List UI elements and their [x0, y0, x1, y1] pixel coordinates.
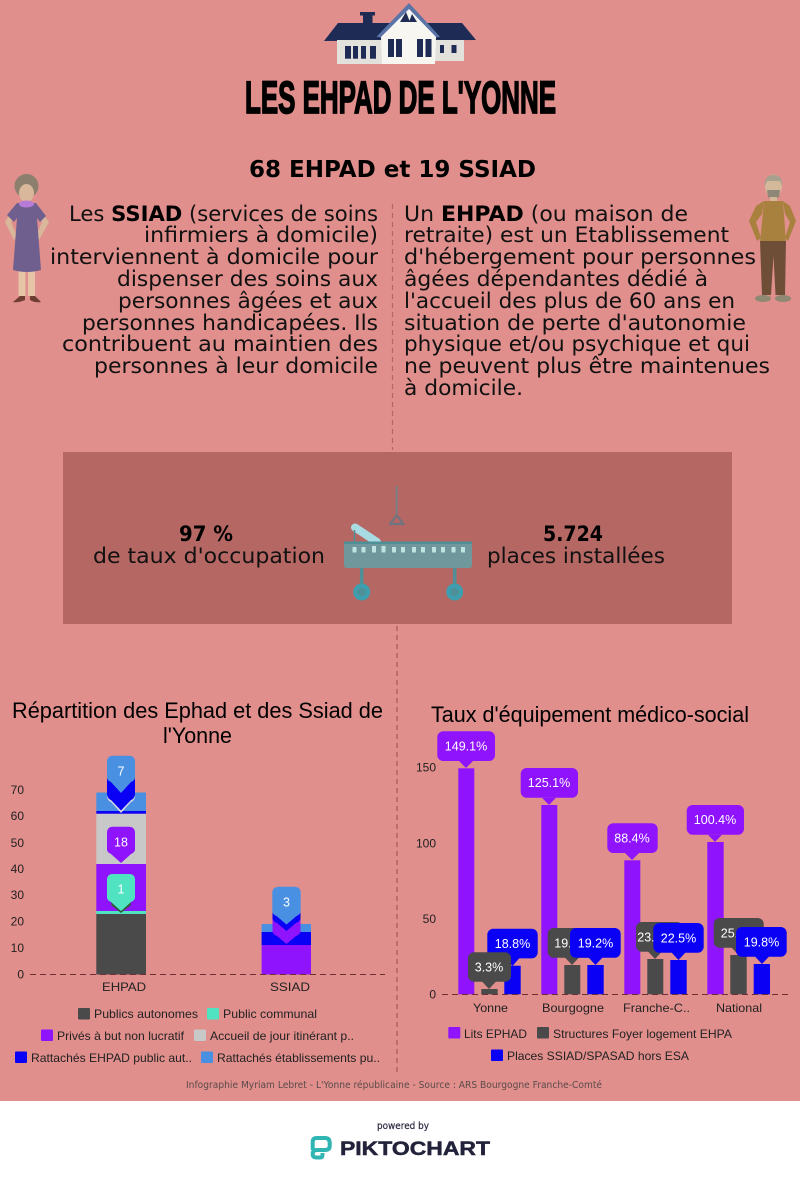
chart title: Répartition des Ephad et des Ssiad de: [12, 698, 383, 723]
callout: 25.x% structures: [714, 918, 764, 955]
icon: elderly man: [749, 174, 796, 302]
callout: blue SSIAD: [272, 905, 300, 931]
text block: EHPAD: à domicile.: [404, 376, 523, 400]
text block: SSIAD: [50, 202, 378, 378]
callout: 3: 3: [283, 896, 290, 910]
callout: 1: [107, 874, 135, 913]
y axis labels: [11, 783, 24, 982]
y axis labels: 100: [416, 836, 436, 850]
callout: 22.5%: 22.5%: [661, 932, 696, 946]
text block: SSIAD: contribuent au maintien des: [62, 332, 378, 356]
stat: places: places installées: [487, 544, 665, 568]
callout: 22.5%: [653, 923, 704, 960]
baseline: [442, 994, 790, 996]
chart title: [12, 698, 383, 748]
callout: rattachés blue: [107, 775, 135, 810]
callout: 3.3%: [468, 952, 511, 989]
callout: rattachés gray: [107, 785, 135, 813]
callout: 18.8%: [487, 929, 538, 966]
y axis labels: 60: [11, 809, 24, 823]
legend: Places SSIAD/SPASAD hors ESA: [507, 1049, 689, 1063]
callout: 23.x% structures: 23.1%: [637, 930, 673, 944]
y axis labels: [416, 760, 436, 1002]
text block: EHPAD: d'hébergement pour personnes: [404, 245, 756, 269]
stat: occupancy: de taux d'occupation: [93, 544, 325, 568]
x axis labels: Yonne: [473, 1001, 508, 1015]
panel: key figures: [63, 452, 732, 624]
callout: 19.2%: 19.2%: [578, 936, 613, 950]
legend: Accueil de jour itinérant p..: [210, 1029, 354, 1043]
footer: Piktochart branding: PIKTOCHART: [340, 1139, 490, 1160]
text block: SSIAD: Les SSIAD (services de soins: [69, 202, 378, 226]
x axis labels: SSIAD: [270, 980, 310, 994]
x axis labels: [473, 1001, 762, 1015]
text block: EHPAD: physique et/ou psychique et qui: [404, 332, 750, 356]
subtitle: 68 EHPAD et 19 SSIAD: [249, 155, 536, 183]
callout: 149.1%: [437, 731, 495, 768]
chart: taux d'équipement: [416, 702, 790, 1063]
callout: 125.1%: 125.1%: [528, 776, 570, 790]
y axis labels: 70: [11, 783, 24, 797]
footer: Piktochart branding: [313, 1121, 490, 1160]
y axis labels: 0: [17, 968, 24, 982]
text block: SSIAD: personnes à leur domicile: [94, 354, 378, 378]
legend: Public communal: [223, 1007, 317, 1021]
callout: 7: [107, 756, 135, 793]
stat: places: 5.724: [543, 522, 603, 546]
stat: occupancy: 97 %: [179, 522, 233, 546]
text block: EHPAD: Un EHPAD (ou maison de: [404, 202, 688, 226]
callout: 19.8%: [736, 927, 787, 964]
x axis labels: Bourgogne: [542, 1001, 604, 1015]
footer: Piktochart branding: powered by: [377, 1121, 429, 1132]
callout: 3: [272, 887, 301, 924]
legend: [448, 1027, 732, 1063]
callout: 88.4%: 88.4%: [614, 832, 650, 846]
y axis labels: 30: [11, 888, 24, 902]
stat: occupancy: [93, 522, 325, 568]
bars: Bourgogne: [541, 805, 604, 994]
legend: Privés à but non lucratif: [57, 1029, 185, 1043]
legend: Lits EPHAD: [464, 1027, 527, 1041]
x axis labels: [102, 980, 310, 994]
x axis labels: Franche-C..: [623, 1001, 690, 1015]
legend: Rattachés établissements pu..: [217, 1051, 380, 1065]
text block: EHPAD: ne peuvent plus être maintenues: [404, 354, 770, 378]
callout: 88.4%: [607, 823, 658, 860]
callout: 100.4%: [687, 805, 744, 842]
y axis labels: 50: [423, 912, 436, 926]
callout: 23.x% structures: [636, 922, 683, 959]
callout: 19.8%: 19.8%: [744, 936, 779, 950]
legend: Rattachés EHPAD public aut..: [31, 1051, 192, 1065]
y axis labels: 10: [11, 941, 24, 955]
callout: 1: 1: [118, 882, 125, 896]
callout: 19.2%: [570, 928, 621, 965]
bar: SSIAD: [262, 924, 311, 974]
y axis labels: 40: [11, 862, 24, 876]
bars: National: [707, 842, 770, 994]
icon: hospital bed: [344, 486, 472, 600]
x axis labels: National: [716, 1001, 762, 1015]
callout: 125.1%: [521, 768, 578, 805]
y axis labels: 20: [11, 914, 24, 928]
callout: 25.x% structures: 25.9%: [721, 926, 756, 940]
legend: [15, 1007, 380, 1065]
baseline: [30, 974, 385, 976]
text block: SSIAD: personnes âgées et aux: [118, 289, 378, 313]
text block: EHPAD: [404, 202, 770, 400]
legend: Publics autonomes: [94, 1007, 198, 1021]
text block: EHPAD: situation de perte d'autonomie: [404, 311, 746, 335]
x axis labels: EHPAD: [102, 980, 146, 994]
callout: 19.x% structures: 19.6%: [554, 936, 590, 950]
text block: SSIAD: infirmiers à domicile): [144, 223, 378, 247]
callout: purple SSIAD: [272, 915, 300, 944]
icon: house: [324, 3, 476, 64]
callout: 7: 7: [118, 764, 125, 778]
chart title: l'Yonne: [163, 723, 232, 748]
icon: Piktochart logo: [313, 1138, 330, 1158]
chart: répartition stacked bars: [11, 698, 385, 1065]
text block: SSIAD: dispenser des soins aux: [117, 267, 378, 291]
title: LES EHPAD DE L'YONNE: [245, 72, 556, 123]
credits: Infographie Myriam Lebret - L'Yonne républicaine - Source : ARS Bourgogne Franche-Comté: [186, 1080, 602, 1091]
stat: places: [487, 522, 665, 568]
chart title: Taux d'équipement médico-social: [431, 702, 749, 727]
text block: EHPAD: retraite) est un Etablissement: [404, 223, 729, 247]
text block: EHPAD: l'accueil des plus de 60 ans en: [404, 289, 735, 313]
callout: 3.3%: 3.3%: [475, 960, 503, 974]
bar: EHPAD: [96, 792, 146, 974]
bars: Yonne: [458, 768, 521, 994]
y axis labels: 150: [416, 760, 436, 774]
text block: SSIAD: personnes handicapées. Ils: [82, 311, 378, 335]
callout: 18: [107, 827, 135, 863]
text block: EHPAD: âgées dépendantes dédié à: [404, 267, 708, 291]
icon: elderly woman: [5, 174, 49, 302]
callout: 18.8%: 18.8%: [495, 937, 530, 951]
callout: 100.4%: 100.4%: [694, 813, 736, 827]
bars: Franche-Comté: [624, 860, 687, 994]
text block: SSIAD: interviennent à domicile pour: [50, 245, 378, 269]
legend: Structures Foyer logement EHPA: [553, 1027, 732, 1041]
y axis labels: 50: [11, 836, 24, 850]
callout: 18: 18: [114, 836, 128, 850]
callout: 19.x% structures: [548, 928, 598, 965]
callout: 149.1%: 149.1%: [445, 740, 487, 754]
y axis labels: 0: [429, 988, 436, 1002]
